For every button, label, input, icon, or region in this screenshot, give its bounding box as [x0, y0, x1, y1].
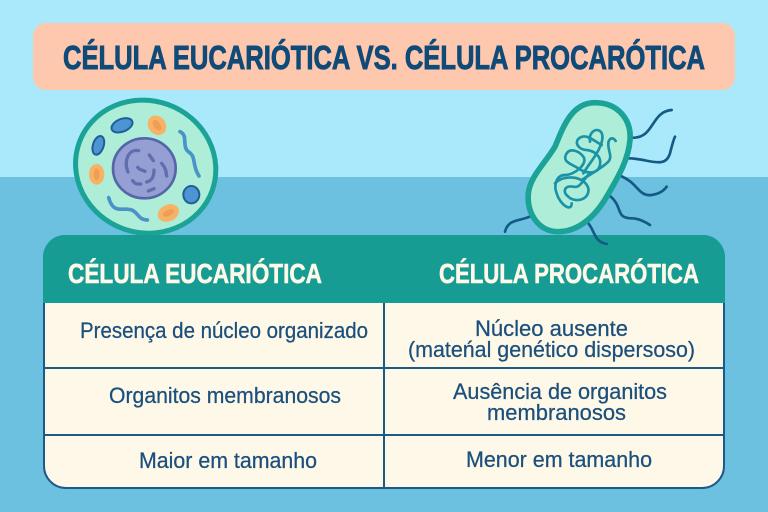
- column heading: prokaryotic: CÉLULA PROCARÓTICA: [439, 258, 699, 289]
- row 1 right: [408, 316, 695, 362]
- row 1 left: Presença de núcleo organizado: [80, 318, 368, 343]
- column heading: eukaryotic: CÉLULA EUCARIÓTICA: [68, 258, 322, 289]
- row 2 right: membranosos: [487, 400, 626, 425]
- row 2 right: [453, 379, 667, 425]
- row 3 right: Menor em tamanho: [466, 447, 652, 472]
- title banner: [33, 23, 735, 90]
- icon: prokaryotic cell: [505, 103, 675, 244]
- row 2 left: Organitos membranosos: [109, 383, 341, 408]
- row 1 right: (mateńal genético dispersoso): [408, 337, 695, 362]
- row 3 left: Maior em tamanho: [139, 448, 317, 473]
- comparison table: [43, 235, 725, 488]
- row 2 right: Ausência de organitos: [453, 379, 667, 404]
- row 1 right: Núcleo ausente: [475, 316, 628, 341]
- icon: eukaryotic cell: [57, 80, 235, 253]
